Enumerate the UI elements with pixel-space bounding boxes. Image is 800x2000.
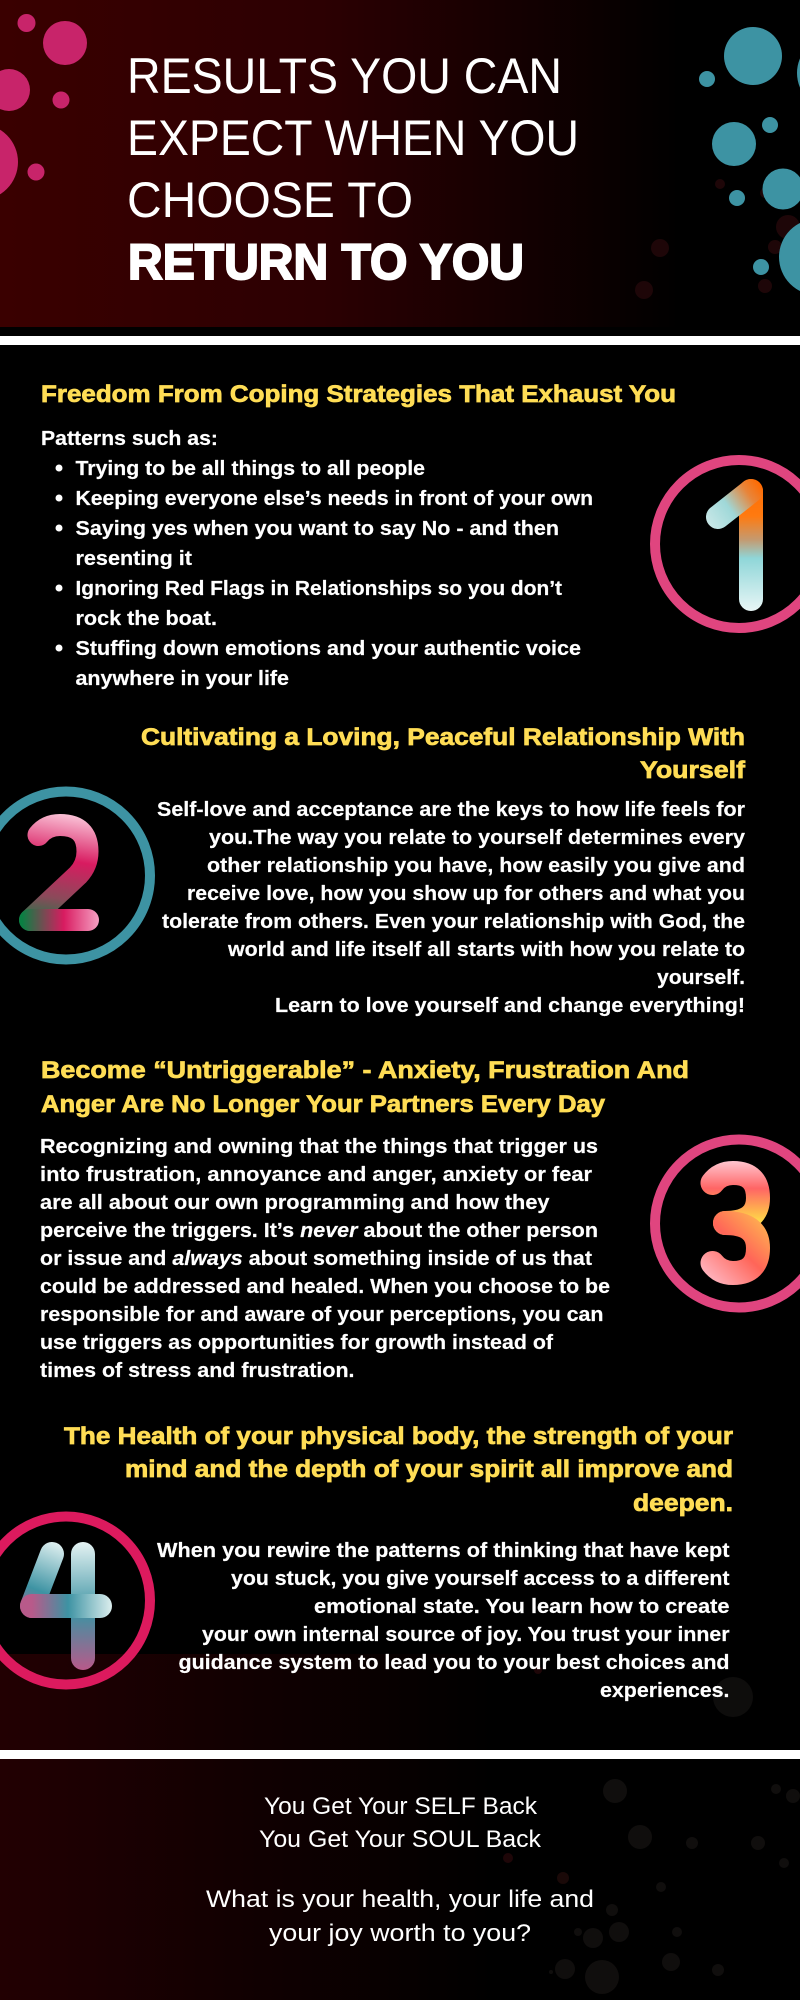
body text 4: When you rewire the patterns of thinking that have kept: [157, 1539, 730, 1562]
body text 3: into frustration, annoyance and anger, anxiety or fear: [40, 1163, 592, 1186]
heading 4: The Health of your physical body, the strength of your: [64, 1423, 733, 1450]
closing message: You Get Your SOUL Back: [259, 1826, 542, 1853]
body text 4: you stuck, you give yourself access to a different: [231, 1567, 730, 1590]
heading 4: deepen.: [633, 1490, 733, 1517]
title: EXPECT WHEN YOU: [127, 110, 579, 166]
bullet list: Stuffing down emotions and your authentic voice: [76, 637, 581, 660]
patterns intro: Patterns such as:: [41, 427, 218, 450]
heading 1: Freedom From Coping Strategies That Exhaust You: [41, 381, 676, 408]
body text 3: could be addressed and healed. When you choose to be: [40, 1275, 610, 1298]
icon: teal bubbles: [699, 27, 800, 295]
body text 4: guidance system to lead you to your best choices and: [178, 1651, 730, 1674]
heading 4: mind and the depth of your spirit all improve and: [125, 1456, 733, 1483]
body text 2: world and life itself all starts with how you relate to: [227, 938, 745, 961]
icon: pink bubbles: [0, 14, 87, 200]
icon: number 4 in ring: [0, 1516, 150, 1684]
faint footer bubbles: [503, 1779, 800, 1994]
bullet list: anywhere in your life: [76, 667, 289, 690]
icon: number 3 in ring: [655, 1140, 800, 1308]
panel: footer: [0, 1759, 800, 2000]
heading 3: [41, 1057, 689, 1118]
faint bubbles behind text: [534, 1666, 753, 1717]
body text 3: are all about our own programming and how they: [40, 1191, 550, 1214]
body text 4: your own internal source of joy. You trust your inner: [202, 1623, 730, 1646]
title: [127, 48, 579, 290]
body text 2: yourself.: [657, 966, 745, 989]
body text 2: you.The way you relate to yourself determines every: [209, 826, 746, 849]
bullet list: Keeping everyone else’s needs in front of your own: [76, 487, 593, 510]
body text 2: tolerate from others. Even your relationship with God, the: [162, 910, 745, 933]
top white divider: [0, 336, 800, 345]
heading 2: [141, 724, 746, 784]
heading 4: [64, 1423, 733, 1517]
body text 3: Recognizing and owning that the things that trigger us: [40, 1135, 598, 1158]
body text 3: or issue and always about something inside of us that: [40, 1247, 592, 1270]
bullet list: rock the boat.: [76, 607, 217, 630]
closing message: You Get Your SELF Back: [264, 1793, 538, 1820]
bullet list: Ignoring Red Flags in Relationships so you don’t: [76, 577, 562, 600]
panel: header: [0, 0, 800, 327]
closing message: What is your health, your life and: [206, 1886, 594, 1913]
body text 2: other relationship you have, how easily you give and: [207, 854, 745, 877]
body text 3: use triggers as opportunities for growth instead of: [40, 1331, 553, 1354]
heading 2: Cultivating a Loving, Peaceful Relationship With: [141, 724, 745, 751]
icon: number 1 in ring: [655, 460, 800, 628]
body text 3: perceive the triggers. It’s never about the other person: [40, 1219, 598, 1242]
body text 3: [40, 1135, 610, 1382]
bullet list: [56, 457, 593, 690]
title: RETURN TO YOU: [128, 234, 524, 290]
heading 3: Become “Untriggerable” - Anxiety, Frustration And: [41, 1057, 689, 1084]
body text 4: emotional state. You learn how to create: [314, 1595, 730, 1618]
bottom white divider: [0, 1750, 800, 1759]
heading 3: Anger Are No Longer Your Partners Every Day: [41, 1091, 605, 1118]
body text 2: receive love, how you show up for others and what you: [187, 882, 745, 905]
closing message: your joy worth to you?: [269, 1920, 531, 1947]
panel: result 2 loving relationship: [0, 724, 746, 1017]
body text 2: Learn to love yourself and change everything!: [275, 994, 745, 1017]
panel: section 4 background glow: [0, 1654, 800, 1750]
panel: result 4 body mind spirit: [0, 1423, 753, 1717]
heading 2: Yourself: [640, 757, 746, 784]
body text 3: responsible for and aware of your perceptions, you can: [40, 1303, 604, 1326]
icon: number 2 in ring: [0, 792, 150, 960]
body text 4: [157, 1539, 730, 1702]
title: CHOOSE TO: [127, 172, 413, 228]
panel: result 1 coping strategies: [41, 381, 800, 690]
bullet list: resenting it: [76, 547, 192, 570]
title: RESULTS YOU CAN: [127, 48, 562, 104]
closing message: [206, 1793, 594, 1947]
body text 2: [157, 798, 746, 1017]
body text 4: experiences.: [600, 1679, 730, 1702]
panel: result 3 untriggerable: [40, 1057, 800, 1382]
bullet list: Saying yes when you want to say No - and then: [76, 517, 559, 540]
icon: faint dark bubbles: [635, 179, 800, 299]
body text 3: times of stress and frustration.: [40, 1359, 354, 1382]
body text 2: Self-love and acceptance are the keys to how life feels for: [157, 798, 745, 821]
bullet list: Trying to be all things to all people: [76, 457, 425, 480]
